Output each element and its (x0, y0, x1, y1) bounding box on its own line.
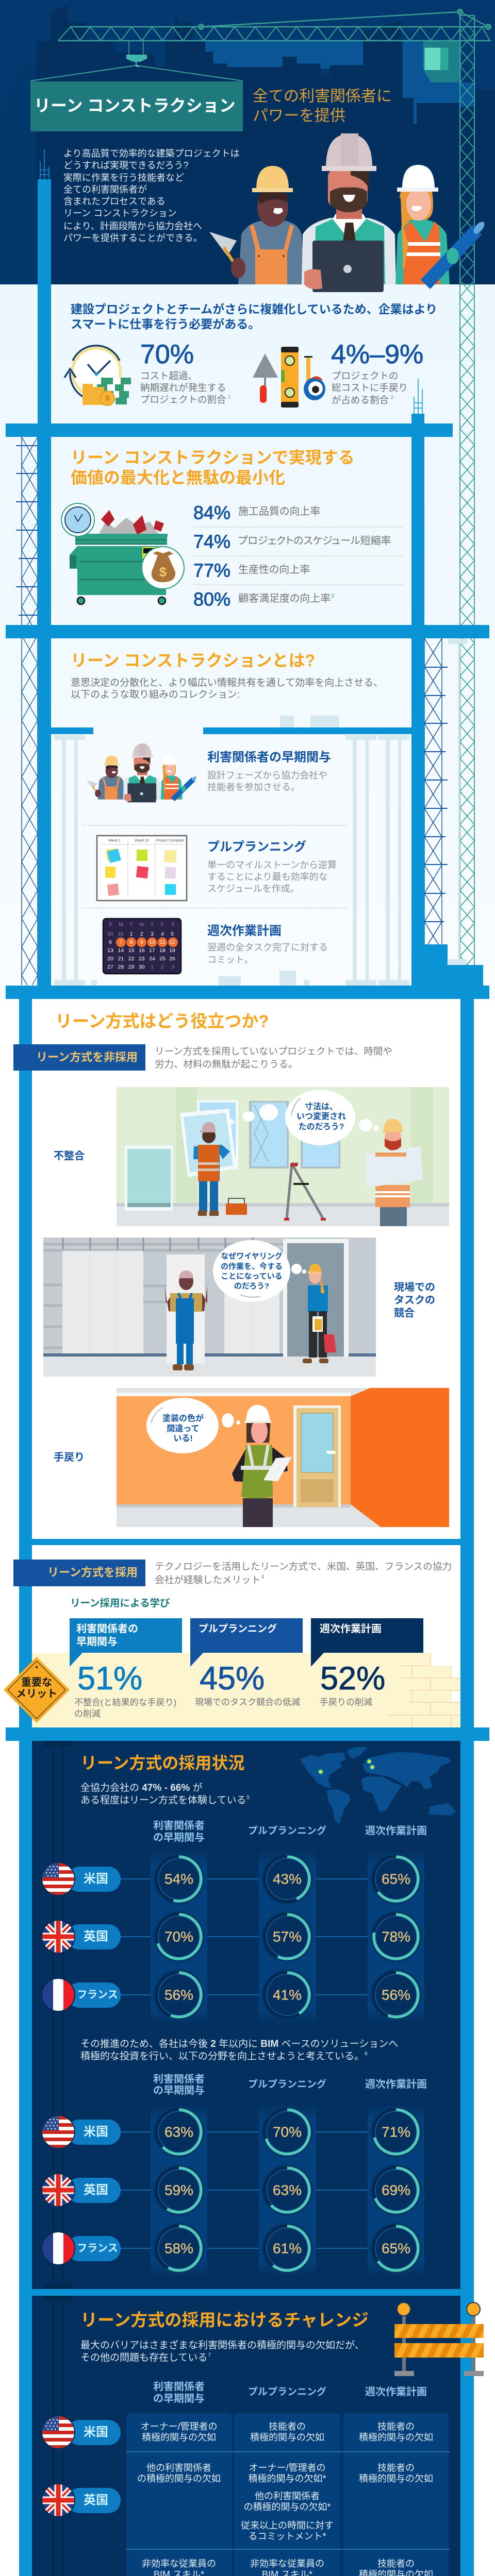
thought bubble (146, 1398, 240, 1453)
stat: 4%-9%: 2 (391, 395, 393, 400)
icon: calendar: 9 (140, 939, 143, 945)
icon: calendar: 6 (109, 939, 112, 945)
icon: clock and money (64, 346, 131, 405)
panel: why smarter (64, 302, 437, 408)
row: France (41, 2223, 422, 2274)
donut 71% (370, 2106, 422, 2158)
subtitle (253, 88, 392, 125)
description: 会社が経験したメリット (155, 1574, 261, 1585)
icon: calendar: 30 (107, 931, 113, 937)
thought bubble: いつ変更され (296, 1111, 346, 1121)
connector lines (121, 1879, 368, 1995)
panel: what is lean construction (71, 651, 383, 974)
icon: clock and money: $ (105, 394, 110, 403)
icon: calendar: 22 (128, 956, 135, 962)
donut 65%: 65% (382, 1871, 410, 1887)
icon: calendar: S (171, 922, 175, 927)
column headers: 週次作業計画 (365, 2078, 427, 2090)
donut 56%: 56% (164, 1987, 193, 2003)
label: on-site task conflict: 現場での (394, 1281, 435, 1293)
column headers: 利害関係者 (153, 2381, 205, 2393)
row: France (41, 2558, 433, 2576)
text: investment plans: 6 (365, 2050, 368, 2057)
row: UK: オーナー/管理者の (249, 2463, 326, 2473)
column headers: プルプランニング (248, 2078, 326, 2090)
donut 61% (261, 2223, 313, 2274)
column headers (153, 2073, 427, 2096)
item: pull planning: 単一のマイルストーンから逆算 (207, 860, 337, 870)
subtitle: 全ての利害関係者に (253, 88, 392, 105)
cream wall with bricks (32, 1653, 460, 1727)
row: USA (41, 2106, 422, 2158)
row: USA (41, 2415, 433, 2449)
donut 63%: 63% (164, 2124, 193, 2140)
row: France (41, 1969, 422, 2021)
item: early stakeholder involvement: 技能者を参加させる。 (207, 782, 300, 792)
column bands (151, 1850, 424, 2025)
icon: calendar: T (130, 922, 133, 927)
intro text: 含まれたプロセスである (63, 196, 166, 207)
donut 59%: 59% (164, 2182, 193, 2198)
donut 65% (370, 1853, 422, 1905)
icon: calendar: 5 (171, 931, 174, 937)
icon: calendar: 12 (169, 939, 175, 945)
stat: 4%-9%: 4%–9% (331, 340, 423, 369)
donut 71%: 71% (382, 2124, 410, 2140)
row: UK (41, 2463, 433, 2541)
card: early stakeholder involvement: 不整合(と結果的な手戻り) (74, 1697, 176, 1707)
donut 56% (370, 1969, 422, 2021)
thought bubble (213, 1240, 306, 1302)
donut 63% (153, 2106, 205, 2158)
row: UK: 他の利害関係者 (146, 2463, 211, 2473)
row: UK: 技能者の (377, 2463, 415, 2473)
icon: whiteboard: Week 1 (108, 839, 121, 843)
icon: whiteboard: Week 10 (135, 839, 149, 843)
donut 43%: 43% (273, 1871, 302, 1887)
icon: calendar: 21 (118, 956, 124, 962)
text: adoption share: 全協力会社の (80, 1782, 142, 1793)
column headers: の早期関与 (153, 2393, 205, 2404)
row: UK (41, 1911, 422, 1962)
icon: calendar: 20 (107, 956, 113, 962)
row: France: 非効率な従業員の (142, 2558, 216, 2569)
row: USA: 積極的関与の欠如 (359, 2432, 433, 2443)
scene: on-site task conflict (43, 1238, 376, 1377)
icon: calendar: 11 (160, 939, 166, 945)
icon: calendar: 15 (128, 947, 135, 954)
row: USA: 技能者の (377, 2421, 415, 2432)
description: リーン方式を採用していないプロジェクトでは、時間や (155, 1046, 392, 1056)
row: USA: 技能者の (269, 2421, 306, 2432)
subtitle: パワーを提供 (253, 107, 345, 125)
icon: calendar: 7 (119, 939, 122, 945)
thought bubble (229, 1090, 379, 1145)
thought bubble: の作業を、今する (221, 1261, 283, 1270)
world map (300, 1747, 456, 1824)
icon: calendar: 27 (107, 964, 113, 970)
item: early stakeholder involvement: 設計フェーズから協力会社や (207, 770, 327, 781)
description: 意思決定の分散化と、より幅広い情報共有を通して効率を向上させる、 (71, 677, 383, 688)
row: UK: 英国 (84, 2494, 108, 2507)
scene: mismatch (117, 1087, 449, 1226)
row: USA (41, 1853, 422, 1905)
donut 63%: 63% (273, 2182, 302, 2198)
column headers (153, 1820, 427, 1843)
item: pull planning: することにより最も効率的な (207, 872, 328, 882)
icon: calendar: 30 (139, 964, 145, 970)
item: early stakeholder involvement: 利害関係者の早期関与 (207, 750, 331, 765)
icon: whiteboard (97, 836, 187, 901)
thought bubble: のだろう? (234, 1282, 269, 1290)
thought bubble: 塗装の色が (162, 1413, 204, 1423)
row: France: 技能者の (377, 2558, 415, 2569)
icon: calendar: 19 (169, 947, 175, 954)
panel: with lean (5, 1560, 460, 1727)
column headers: プルプランニング (248, 1825, 326, 1836)
badge: key benefits: メリット (16, 1688, 57, 1700)
icon: calendar (103, 919, 181, 974)
stat: 70%: 1 (228, 394, 231, 399)
intro text: 全ての利害関係者が (63, 184, 147, 195)
heading: リーン方式の採用におけるチャレンジ (80, 2310, 369, 2330)
donut 57%: 57% (273, 1929, 302, 1944)
icon: calendar: 16 (139, 947, 145, 954)
text: investment plans: 2 年以内に BIM ベースのソリューションへ (210, 2038, 398, 2049)
donut 78%: 78% (382, 1929, 410, 1944)
stat: 4%-9%: が占める割合 (332, 395, 389, 405)
icon: calendar: 17 (149, 947, 155, 954)
donut 54% (153, 1853, 205, 1905)
column headers: 週次作業計画 (365, 1825, 427, 1837)
title sign: リーン コンストラクション (34, 96, 236, 115)
heading: リーン コンストラクションで実現する (71, 448, 355, 467)
icon: calendar: F (161, 922, 164, 927)
donut 78% (370, 1911, 422, 1962)
stat list: 生産性の向上率 (238, 564, 310, 575)
icon: whiteboard: Project Complete (156, 839, 184, 843)
heading: リーン コンストラクションとは? (71, 651, 315, 670)
donut 43% (261, 1853, 313, 1905)
item: weekly work planning: 週次作業計画 (207, 924, 282, 938)
description: 最大のバリアはさまざまな利害関係者の積極的関与の欠如だが、 (80, 2339, 365, 2350)
icon: calendar: 1 (130, 931, 133, 937)
heading: 建設プロジェクトとチームがさらに複雑化しているため、企業はより (71, 302, 437, 316)
card: pull planning: プルプランニング (199, 1623, 277, 1634)
decorative building outlines (51, 639, 468, 986)
description: 4 (261, 1574, 265, 1580)
description: 以下のような取り組みのコレクション: (71, 688, 240, 700)
card: early stakeholder involvement: の削減 (74, 1708, 101, 1719)
icon: dumpster with clock and money bag (61, 503, 184, 604)
donut 54%: 54% (164, 1871, 193, 1887)
intro text: どうすれば実現できるだろう? (63, 160, 189, 171)
row: UK: 従来以上の時間に対す (241, 2520, 334, 2531)
stat list: プロジェクトのスケジュール短縮率 (238, 535, 391, 547)
stat list: 80% (193, 588, 230, 610)
stat: 70%: 70% (140, 340, 194, 369)
donut 70%: 70% (273, 2124, 302, 2140)
heading: リーン方式の採用状況 (80, 1754, 244, 1772)
intro text: 実際に作業を行う技能者など (63, 173, 184, 183)
donut 58%: 58% (164, 2240, 193, 2257)
donut 70%: 70% (164, 1929, 193, 1944)
icon: calendar: W (139, 922, 144, 927)
donut 69%: 69% (382, 2182, 410, 2198)
card: weekly work planning: 週次作業計画 (320, 1623, 382, 1635)
donut 41%: 41% (273, 1987, 302, 2003)
steel stub left (40, 149, 49, 179)
donut 57% (261, 1911, 313, 1962)
stat list: 84% (193, 502, 230, 523)
pole (43, 2296, 73, 2576)
column headers: 週次作業計画 (365, 2386, 427, 2398)
card: weekly work planning: 手戻りの削減 (320, 1697, 372, 1707)
tag: with lean (13, 1560, 145, 1586)
row: France: フランス (77, 2243, 118, 2254)
connector lines (121, 2132, 368, 2248)
stat list: 施工品質の向上率 (238, 505, 320, 517)
icon: calendar: 8 (130, 939, 133, 945)
icon: calendar: 29 (128, 964, 135, 970)
icon: calendar: 28 (118, 964, 124, 970)
tag: without lean (13, 1044, 145, 1071)
row: USA: 米国 (84, 2426, 108, 2439)
intro text: より高品質で効率的な建築プロジェクトは (63, 148, 240, 159)
row: UK: 他の利害関係者 (255, 2491, 320, 2501)
row: USA: 積極的関与の欠如 (142, 2432, 216, 2443)
hero panel (0, 0, 495, 284)
donut 70% (153, 1911, 205, 1962)
card: weekly work planning (311, 1618, 423, 1707)
donut 41% (261, 1969, 313, 2021)
row: UK (41, 2164, 422, 2216)
intro text: により、計画段階から協力会社へ (63, 221, 202, 231)
thought bubble: ことになっている (221, 1272, 283, 1281)
icon: calendar: 1 (151, 964, 154, 970)
card: early stakeholder involvement: 早期関与 (76, 1636, 118, 1648)
icon: calendar: 4 (161, 931, 164, 937)
description: その他の問題も存在している (80, 2351, 207, 2363)
row: USA: 米国 (84, 2125, 108, 2139)
donut 61%: 61% (273, 2240, 302, 2257)
icon: calendar: 10 (149, 939, 155, 945)
item: weekly work planning: 翌週の全タスク完了に対する (207, 942, 328, 953)
column headers: 利害関係者 (153, 2073, 205, 2085)
row: UK: の積極的関与の欠如 (137, 2473, 221, 2484)
card: weekly work planning: 52% (320, 1660, 385, 1697)
tag: without lean: リーン方式を非採用 (36, 1051, 138, 1063)
donut 70% (261, 2106, 313, 2158)
title sign (30, 81, 243, 131)
card: pull planning: 現場でのタスク競合の低減 (195, 1697, 300, 1707)
stat list (193, 502, 404, 610)
thought bubble: なぜワイヤリング (221, 1251, 283, 1260)
label: rework: 手戻り (54, 1451, 85, 1463)
thought bubble: いる! (173, 1434, 193, 1443)
table of barriers (41, 2413, 450, 2576)
text: adoption share: 5 (246, 1795, 250, 1800)
column headers: の早期関与 (153, 2084, 205, 2096)
icon: road barrier (394, 2302, 484, 2376)
item: weekly work planning: コミット。 (207, 955, 254, 965)
card: pull planning (190, 1618, 303, 1707)
badge: key benefits (5, 1658, 69, 1722)
stat list: 3 (331, 594, 334, 599)
thought bubble: 間違って (167, 1423, 200, 1433)
description: テクノロジーを活用したリーン方式で、米国、英国、フランスの協力 (155, 1561, 452, 1571)
stat list: 顧客満足度の向上率 (238, 593, 331, 604)
badge: key benefits: 重要な (21, 1676, 52, 1688)
icon: calendar: S (109, 922, 112, 927)
card: early stakeholder involvement: 51% (77, 1660, 142, 1697)
icon: calendar: 2 (161, 964, 164, 970)
item: pull planning: プルプランニング (207, 840, 306, 854)
stat: 70%: 納期遅れが発生する (140, 382, 226, 393)
label: on-site task conflict: タスクの (394, 1294, 435, 1306)
row: UK: の積極的関与の欠如* (243, 2502, 331, 2512)
panel: challenges (41, 2296, 484, 2576)
icon: calendar: 24 (149, 956, 155, 962)
icon: calendar: 2 (140, 931, 143, 937)
panel: value maximised waste minimised (61, 448, 404, 610)
description: 労力、材料の無駄が起こりうる。 (155, 1058, 298, 1070)
card: early stakeholder involvement (70, 1618, 182, 1719)
item: pull planning (97, 836, 337, 901)
donut 65% (370, 2223, 422, 2274)
card: pull planning: 45% (200, 1660, 265, 1697)
donut 65%: 65% (382, 2240, 410, 2257)
donut 58% (153, 2223, 205, 2274)
row: USA: オーナー/管理者の (140, 2421, 218, 2432)
donut 59% (153, 2164, 205, 2216)
text: adoption share: 47% - 66% が (142, 1783, 203, 1793)
icon: calendar: T (151, 922, 154, 927)
heading: リーン方式はどう役立つか? (55, 1012, 269, 1030)
heading: 価値の最大化と無駄の最小化 (71, 468, 285, 487)
tower crane (30, 9, 491, 284)
row: UK: 英国 (84, 2183, 108, 2197)
text: investment plans: 積極的な投資を行い、以下の分野を向上させようと考えている。 (80, 2050, 364, 2062)
label: on-site task conflict: 競合 (394, 1307, 415, 1319)
stat: 4%-9%: プロジェクトの (332, 370, 399, 381)
column bands (151, 2104, 424, 2277)
donut 63% (261, 2164, 313, 2216)
icon: calendar: 31 (118, 931, 124, 937)
item: early stakeholder involvement (86, 743, 331, 802)
map markers (319, 1759, 374, 1774)
text: investment plans: その推進のため、各社は今後 (80, 2038, 210, 2049)
pole (43, 1741, 73, 2289)
item: pull planning: スケジュールを作成。 (207, 884, 300, 894)
donut 56%: 56% (382, 1987, 410, 2003)
label: mismatch: 不整合 (54, 1150, 85, 1162)
icon: calendar: 3 (151, 931, 154, 937)
icon: trowel, level and tape (253, 347, 325, 408)
intro text: リーン コンストラクション (63, 208, 177, 218)
row: USA: 米国 (84, 1872, 108, 1886)
column headers: プルプランニング (248, 2385, 326, 2398)
stat: 70% (140, 340, 231, 405)
donut 69% (370, 2164, 422, 2216)
skyline (0, 5, 495, 284)
icon: calendar: 13 (107, 947, 113, 954)
stat: 4%-9%: 総コストに手戻り (332, 382, 408, 393)
icon: calendar: 18 (159, 947, 166, 954)
subheading: リーン採用による学び (70, 1597, 170, 1609)
icon: calendar: 23 (139, 956, 145, 962)
icon: calendar: 25 (159, 956, 166, 962)
panel: lean adoption status (41, 1741, 456, 2289)
row: UK: 積極的関与の欠如* (248, 2473, 326, 2484)
illustration: construction workers (209, 133, 486, 292)
column headers (153, 2381, 427, 2404)
row: USA: 積極的関与の欠如 (250, 2432, 324, 2443)
heading: スマートに仕事を行う必要がある。 (71, 317, 260, 331)
icon: calendar: 26 (169, 956, 175, 962)
row: UK: るコミットメント* (248, 2531, 326, 2541)
row: France: フランス (77, 1989, 118, 2001)
icon: dumpster with clock and money bag: $ (159, 564, 167, 580)
thought bubble: 寸法は、 (305, 1101, 338, 1111)
stat: 70%: コスト超過、 (140, 370, 197, 381)
thought bubble: たのだろう? (299, 1122, 344, 1131)
stat list: 77% (193, 560, 230, 581)
stat list: 74% (193, 531, 230, 552)
description: 7 (208, 2352, 211, 2358)
icon: calendar: M (119, 922, 123, 927)
icon: calendar: 3 (171, 964, 174, 970)
card: early stakeholder involvement: 利害関係者の (76, 1623, 138, 1635)
item: weekly work planning (103, 919, 328, 974)
tag: with lean: リーン方式を採用 (47, 1566, 138, 1579)
row: France: 非効率な従業員の (250, 2558, 324, 2569)
stat: 70%: プロジェクトの割合 (140, 394, 226, 405)
scene: rework (117, 1388, 449, 1527)
column headers: 利害関係者 (153, 1820, 205, 1832)
column headers: の早期関与 (153, 1832, 205, 1843)
stat: 4%-9% (331, 340, 423, 405)
row: UK: 積極的関与の欠如 (359, 2473, 433, 2484)
intro text: パワーを提供することができる。 (63, 233, 203, 243)
icon: calendar: 14 (118, 947, 124, 954)
row: UK: 英国 (84, 1930, 108, 1943)
panel: how lean helps (13, 1012, 449, 1527)
text: adoption share: ある程度はリーン方式を体験している (80, 1794, 246, 1805)
donut 56% (153, 1969, 205, 2021)
